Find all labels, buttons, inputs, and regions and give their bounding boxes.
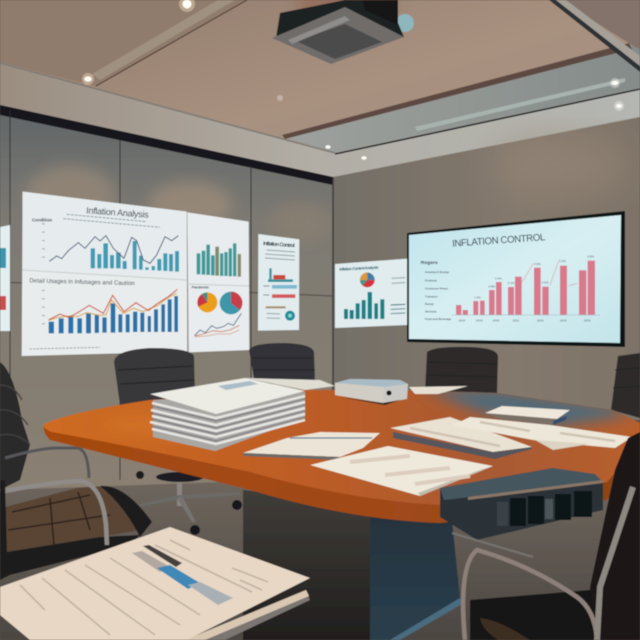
poster: inflation control small [258,234,299,331]
chair: right foreground [452,432,640,640]
poster: cut-off left [0,225,10,331]
documents on table [243,406,632,496]
right wall [333,117,640,420]
soffit band [0,62,640,177]
chart: pie [360,273,375,287]
poster: inflation control small: Inflation Control [263,241,295,249]
legend list: Rogers [421,260,438,266]
cable box on table edge [440,468,603,540]
chair back 1 [114,348,195,405]
chair back 3 [425,347,498,394]
screen: inflation control display [407,211,625,347]
legend list: Consumer Prices [425,286,448,290]
chart: trend lines [195,313,241,337]
doc: flat sheet front [310,446,493,496]
poster: side charts: Pandemic [192,286,209,290]
poster: inflation analysis wall display [22,192,187,356]
table pedestal [243,490,462,640]
chart: pink bars: 2018 [458,318,465,322]
chart: teal pie [220,292,242,314]
chart: pink bars: 2024 [584,318,591,322]
chart: pink bars: 2.8% [488,284,495,288]
table reflection [100,388,630,439]
poster: side charts [187,212,249,352]
report: foreground booklet [0,527,310,640]
chart: pink bars: 3.1% [508,281,515,285]
poster: right wall chart: Inflation Control Analysis [339,265,379,272]
legend list [421,260,452,321]
projector on table [335,379,468,405]
chair back 2 [249,343,315,384]
heading: inflation control: INFLATION CONTROL [452,232,546,250]
poster: inflation analysis wall display: Condition [32,217,53,222]
chart: pink bars: 2021 [513,318,520,322]
chart: small area [268,268,293,282]
poster: right wall chart [335,259,407,328]
chart: pink bars: 5.8% [587,254,594,258]
carpet [0,478,640,640]
chair base under table [136,471,242,535]
legend list: Housing & Energy [425,270,450,274]
legend list: Food and Beverage [425,317,452,321]
chart: pink bars [452,254,600,322]
ceiling lights [82,0,624,160]
left wall [0,105,333,490]
legend list: Rental [425,302,434,306]
doc: small back right [485,413,567,425]
chart: pink bars: 5.2% [559,259,566,263]
heading: inflation analysis: Inflation Analysis [86,205,150,220]
chart: teal bars [197,243,241,277]
seat cushion [5,486,140,552]
chart: pink bars: 2020 [493,318,500,322]
chart: pink bars: 4.9% [534,262,541,266]
chart: pink bars: 2022 [537,318,544,322]
doc: charted booklet [243,432,380,457]
chart: pink bars: 2019 [476,318,483,322]
legend list: Producer [425,279,437,283]
report bars [132,545,233,605]
doc: loose right [453,417,632,448]
chart: pink bars: 2023 [560,318,567,322]
ceiling projector unit [272,0,414,64]
ceiling [0,0,640,190]
chart: pink bars: 3.0% [542,281,549,285]
chair: left foreground [0,362,152,580]
chair back 4 [611,353,640,418]
legend list: Services [425,310,437,314]
chart: teal bars [344,292,384,319]
conference table [44,388,640,523]
doc: open report center [390,417,532,452]
chart: orange pie [197,292,217,312]
icon: teal donut [285,311,295,321]
legend list: Transport [425,294,438,298]
chairs behind table [114,343,640,418]
heading: detail analysis: Detail Usages in Infusages and Caution [29,278,135,287]
chart: pink bars: 3.4% [495,276,502,280]
stack of reports [150,378,335,451]
chart: pink bars: 1.5% [474,296,481,300]
chart: lower bars and line [43,289,178,333]
chart: upper bars and line [43,223,179,272]
